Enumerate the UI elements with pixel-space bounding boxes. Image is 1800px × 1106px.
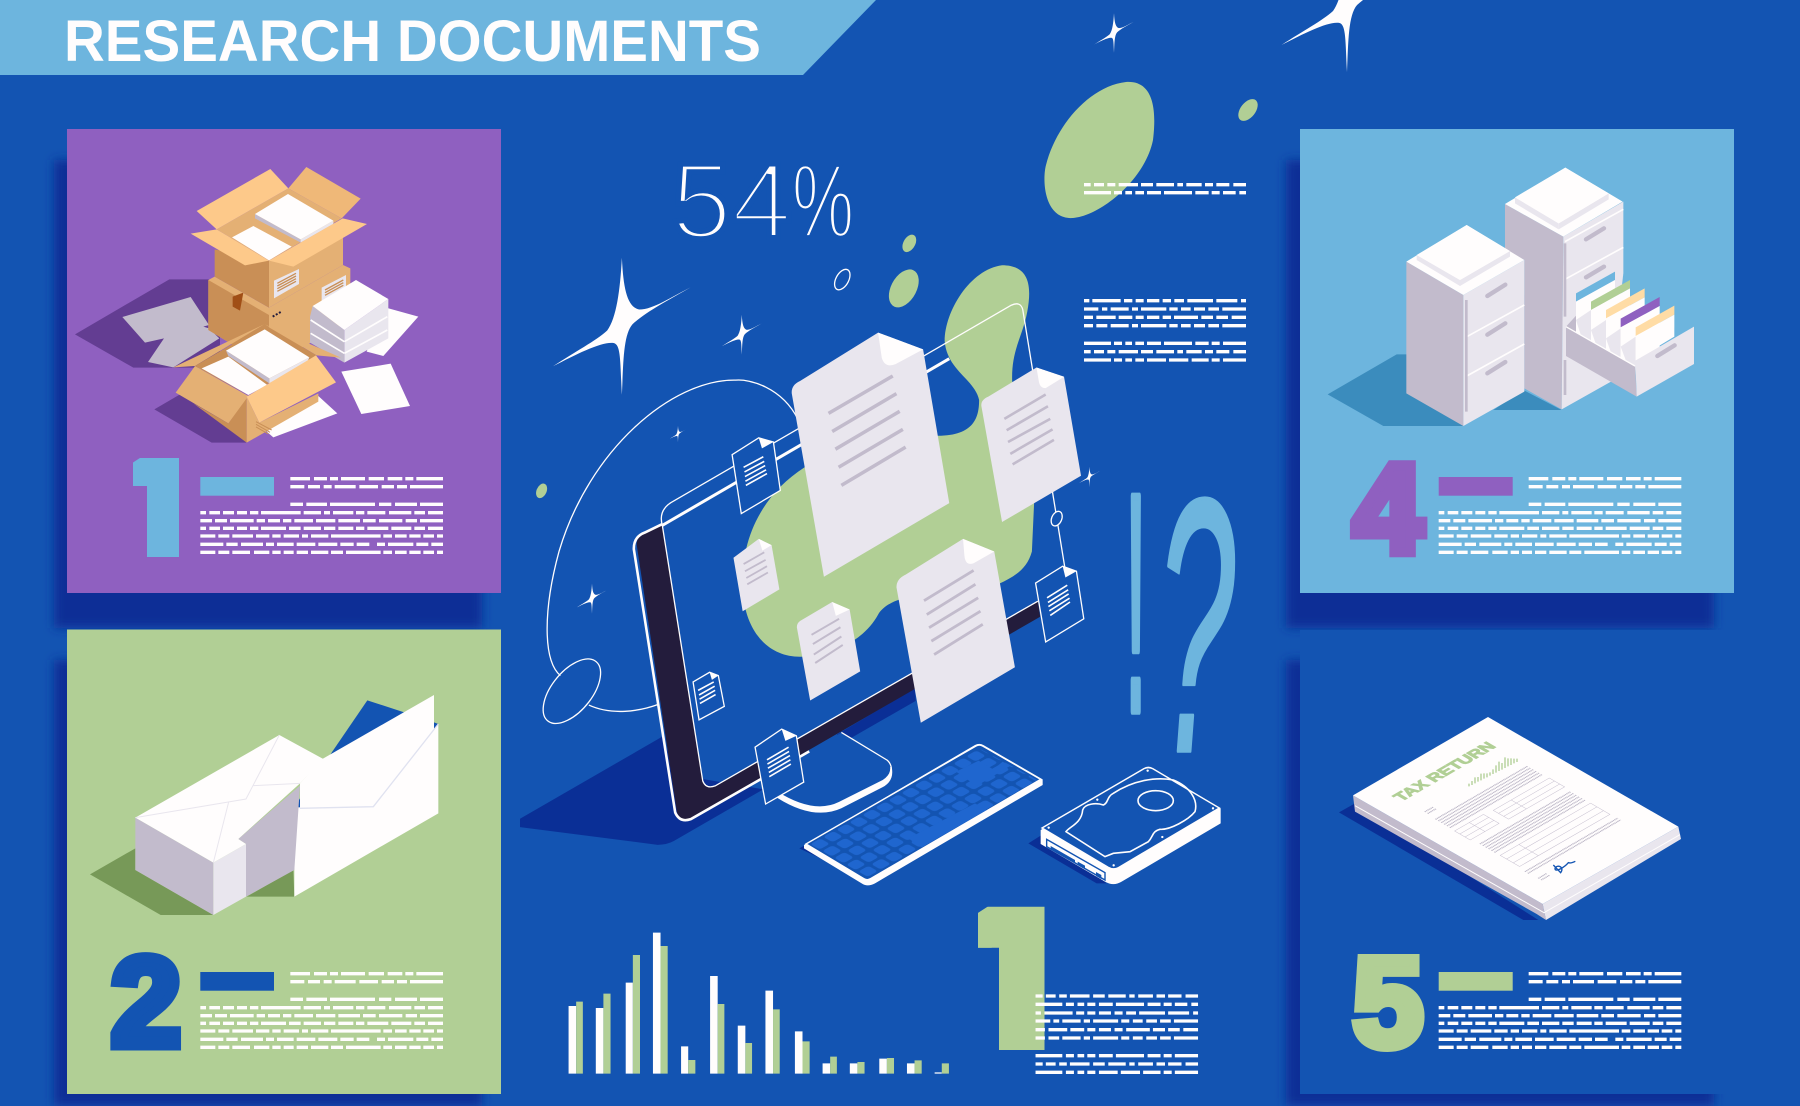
icon: tax return document [1339,717,1681,920]
monitor frame [637,525,1040,820]
document right [981,368,1081,522]
green bars [576,946,949,1074]
dash accent [1439,972,1513,991]
panel 4: filing cabinets [1300,129,1734,593]
text block [200,479,443,552]
green drops [534,233,925,500]
document small middle [797,602,860,700]
signature [1553,861,1575,873]
green blob [742,265,1034,657]
center text block middle [1084,301,1246,360]
central illustration: monitor with documents [520,233,1084,845]
text block [200,974,443,1047]
hard drive [1028,767,1221,884]
small green dot [1234,96,1262,124]
icon: filing cabinets [1328,168,1694,426]
stat: 54%: 54 [672,140,792,261]
text block [1439,479,1681,552]
panel 1: boxes of papers [67,129,501,593]
dash accent [200,477,274,496]
stat: 54% [672,140,854,261]
documents [733,333,1081,723]
dash accent [1439,477,1513,496]
number 2: 2 [111,932,181,1073]
panel shadows [54,160,1714,1106]
icon: cardboard boxes with papers [75,167,418,443]
keys [809,747,1037,877]
monitor stand [777,732,892,813]
number 5: 5 [1353,932,1423,1073]
panel 2: envelopes [67,630,501,1094]
dash accent [200,972,274,991]
large number 1: 1 [964,873,1070,1088]
icon: envelopes [90,695,438,915]
orbit line [532,267,853,732]
sparkles [553,0,1412,614]
title: RESEARCH DOCUMENTS [64,9,761,74]
center text block top [1084,185,1246,193]
monitor shadow [520,737,763,845]
white bars [569,933,942,1074]
panel 5: tax return [1300,630,1734,1094]
number 1: 1 [123,436,197,582]
exclamation mark: ! [1124,430,1148,778]
text block [1439,974,1681,1047]
keyboard [799,744,1043,885]
small outlined documents [693,438,1084,804]
document heading: TAX RETURN [1390,740,1500,804]
document small left [733,539,779,611]
title banner [0,0,876,75]
top green blob [1044,82,1154,218]
document lower [896,539,1015,723]
text block bottom center [1036,996,1198,1072]
bar chart [569,933,949,1074]
number 4: 4 [1353,438,1423,579]
mini chart on document [1469,757,1517,786]
stat: 54%: % [792,143,854,259]
question mark: ? [1157,425,1236,829]
document large [792,333,949,577]
